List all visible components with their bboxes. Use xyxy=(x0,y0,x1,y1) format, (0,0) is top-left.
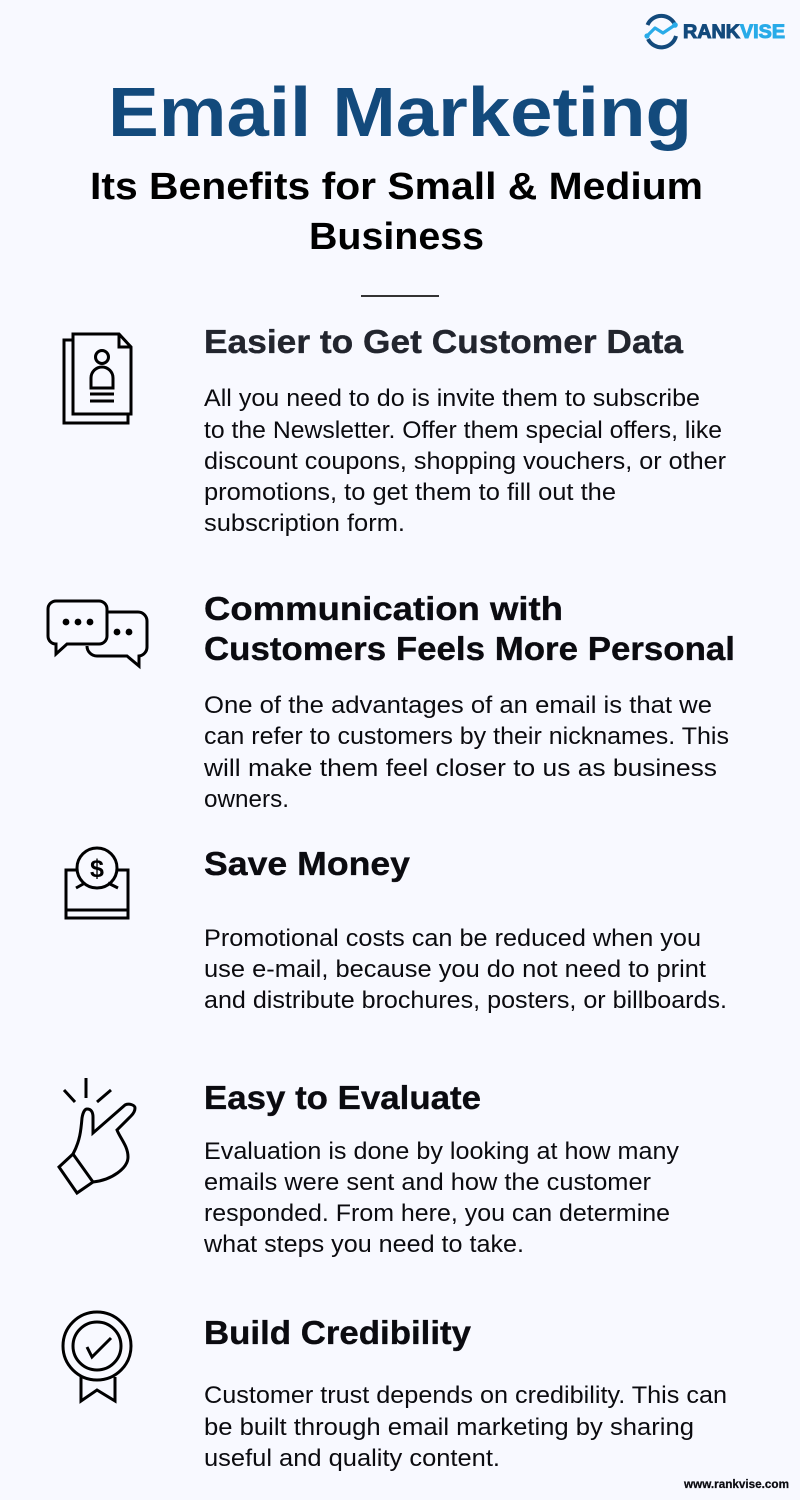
text: personal communication: can refer to customers by their nicknames. This xyxy=(204,723,729,750)
text: customer data: subscription form. xyxy=(204,510,405,537)
text: customer data: promotions, to get them to fill out the xyxy=(204,479,616,506)
text: build credibility: Customer trust depends on credibility. This can xyxy=(204,1382,727,1409)
heading: save money: Save Money xyxy=(204,845,411,882)
footer url: www.rankvise.com xyxy=(683,1477,789,1491)
text: save money: use e-mail, because you do not need to print xyxy=(204,956,706,983)
logo: Rankvise xyxy=(644,16,785,47)
text: save money xyxy=(204,925,727,1014)
text: build credibility: useful and quality content. xyxy=(204,1445,500,1472)
heading: personal communication xyxy=(204,590,735,667)
title: Email Marketing xyxy=(108,73,692,151)
heading: personal communication: Communication with xyxy=(204,590,563,627)
icon: dollar envelope xyxy=(66,848,128,918)
icon: dollar envelope: $ xyxy=(90,855,104,883)
icon: award badge xyxy=(63,1312,131,1401)
subtitle: Business xyxy=(309,216,484,258)
text: easy to evaluate: responded. From here, you can determine xyxy=(204,1200,670,1227)
text: save money: Promotional costs can be reduced when you xyxy=(204,925,701,952)
panel: personal communication xyxy=(48,590,735,813)
text: personal communication xyxy=(203,692,729,813)
panel: easy to evaluate xyxy=(59,1078,679,1258)
heading: personal communication: Customers Feels More Personal xyxy=(204,630,735,667)
text: personal communication: owners. xyxy=(204,786,289,813)
panel: build credibility xyxy=(63,1312,727,1472)
heading: build credibility: Build Credibility xyxy=(204,1314,472,1351)
text: easy to evaluate: Evaluation is done by looking at how many xyxy=(204,1138,679,1165)
subtitle xyxy=(90,166,703,258)
heading: easy to evaluate: Easy to Evaluate xyxy=(204,1079,481,1116)
text: easy to evaluate: what steps you need to take. xyxy=(203,1231,524,1258)
text: easy to evaluate xyxy=(203,1138,679,1258)
logo: Rankvise: RANK xyxy=(683,22,740,43)
heading: customer data: Easier to Get Customer Data xyxy=(204,323,684,360)
text: customer data: All you need to do is invite them to subscribe xyxy=(204,385,700,412)
logo: Rankvise: VISE xyxy=(740,22,785,43)
subtitle: Its Benefits for Small & Medium xyxy=(90,166,703,208)
text: personal communication: will make them feel closer to us as business xyxy=(203,755,717,782)
text: save money: and distribute brochures, posters, or billboards. xyxy=(204,987,727,1014)
icon: chat bubbles xyxy=(48,601,147,666)
text: customer data: to the Newsletter. Offer them special offers, like xyxy=(204,417,722,444)
text: customer data: discount coupons, shopping vouchers, or other xyxy=(204,448,726,475)
icon: contact document xyxy=(64,334,131,423)
text: build credibility: be built through email marketing by sharing xyxy=(204,1414,694,1441)
text: build credibility xyxy=(204,1382,727,1472)
text: easy to evaluate: emails were sent and how the customer xyxy=(204,1169,651,1196)
icon: snapping hand xyxy=(59,1078,135,1193)
panel: save money xyxy=(66,845,727,1014)
text: customer data xyxy=(204,385,726,537)
text: personal communication: One of the advantages of an email is that we xyxy=(204,692,712,719)
panel: customer data xyxy=(64,323,726,537)
